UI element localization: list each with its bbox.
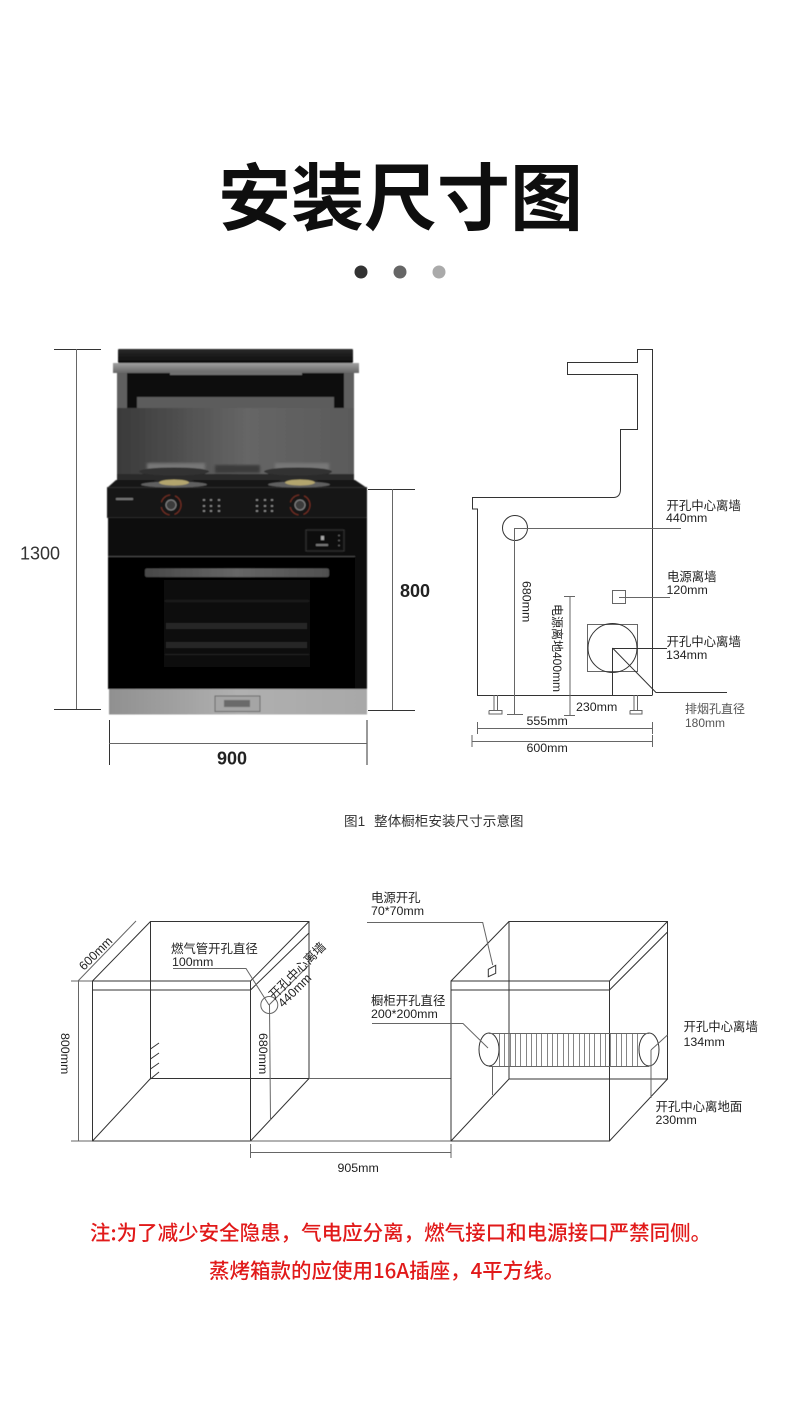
flue duct	[479, 1033, 659, 1066]
floor height label: 开孔中心离地面	[656, 1099, 742, 1114]
left cabinet perspective diagram	[58, 921, 329, 1141]
safety note line 1: 注:为了减少安全隐患，气电应分离，燃气接口和电源接口严禁同侧。	[90, 1216, 711, 1246]
pagination dots	[354, 266, 446, 278]
dimension: height 1300	[20, 349, 101, 710]
side profile diagram	[472, 349, 745, 755]
floor height value: 230mm	[656, 1113, 697, 1127]
cabinet frame	[92, 922, 309, 1141]
caption: 整体橱柜安装尺寸示意图	[374, 813, 524, 829]
gas hole label: 开孔中心离墙	[666, 498, 741, 513]
dimension: height 800	[368, 489, 430, 710]
cabinet legs	[489, 695, 642, 714]
dimension: width 900: 900	[217, 748, 247, 768]
caption: 图1	[344, 814, 365, 829]
diagonal value: 440mm	[275, 971, 314, 1010]
gap between cabinets	[250, 1078, 451, 1175]
depth 600mm dimension: 600mm	[76, 934, 115, 973]
hood rail	[113, 363, 359, 375]
bottom steel kick plate	[109, 689, 367, 714]
flue diameter label: 排烟孔直径	[685, 702, 745, 716]
power distance: 120mm	[666, 583, 708, 597]
dimension: width 900	[109, 720, 367, 768]
gas pipe label: 燃气管开孔直径	[171, 941, 258, 956]
cooktop control band	[107, 480, 367, 518]
flue opening	[588, 624, 727, 695]
power label: 电源离墙	[667, 569, 717, 584]
upper front panel	[108, 518, 367, 556]
dimension 555mm	[478, 714, 652, 734]
right hole value: 134mm	[684, 1035, 725, 1049]
gas pipe hole	[173, 965, 309, 1120]
left burner	[139, 468, 209, 488]
oven door	[108, 518, 367, 689]
back panel	[117, 408, 354, 481]
height 800mm dimension: 800mm	[58, 1033, 72, 1074]
power value: 70*70mm	[371, 904, 424, 918]
vertical power height label: 电源离地400mm	[550, 604, 565, 692]
safety note line 2: 蒸烤箱款的应使用16A插座，4平方线。	[209, 1254, 564, 1284]
flue centre label: 开孔中心离墙	[666, 634, 741, 649]
flue centre distance: 134mm	[666, 648, 707, 662]
product: integrated stove front view	[107, 349, 367, 714]
power opening	[367, 922, 496, 977]
hood interior	[117, 372, 354, 409]
side hatch	[150, 1043, 159, 1079]
label 230mm: 230mm	[576, 700, 617, 714]
flue diameter value: 180mm	[685, 716, 725, 730]
dimension 555mm: 555mm	[526, 714, 568, 728]
gap between cabinets: 905mm	[338, 1161, 379, 1175]
power socket	[612, 590, 670, 604]
cabinet frame	[451, 922, 668, 1141]
vertical 680mm: 680mm	[256, 1033, 270, 1074]
height 800mm dimension	[58, 981, 92, 1141]
right hole label: 开孔中心离墙	[684, 1019, 758, 1034]
dimension: height 1300: 1300	[20, 544, 60, 564]
cabinet outline	[472, 349, 652, 696]
oven window and racks	[164, 580, 310, 667]
cabinet hole value: 200*200mm	[371, 1007, 438, 1021]
cabinet hole label: 橱柜开孔直径	[371, 994, 445, 1008]
title: 安装尺寸图	[218, 159, 583, 240]
top cap	[118, 349, 353, 363]
vertical 680mm: 680mm	[520, 581, 534, 622]
power height tick line	[564, 596, 575, 716]
dimension 600mm	[472, 735, 652, 755]
duct leaders	[372, 1024, 668, 1098]
dimension 600mm: 600mm	[526, 741, 568, 755]
gas hole distance: 440mm	[666, 511, 707, 525]
gas hole	[502, 516, 681, 714]
power label: 电源开孔	[371, 891, 421, 905]
gas pipe value: 100mm	[172, 955, 213, 969]
diagonal label: 开孔中心离墙	[266, 939, 329, 1002]
right cabinet perspective diagram	[367, 891, 758, 1141]
dimension: height 800: 800	[400, 581, 430, 601]
right burner	[264, 468, 332, 488]
depth 600mm dimension	[76, 921, 136, 981]
oven handle	[145, 568, 329, 577]
